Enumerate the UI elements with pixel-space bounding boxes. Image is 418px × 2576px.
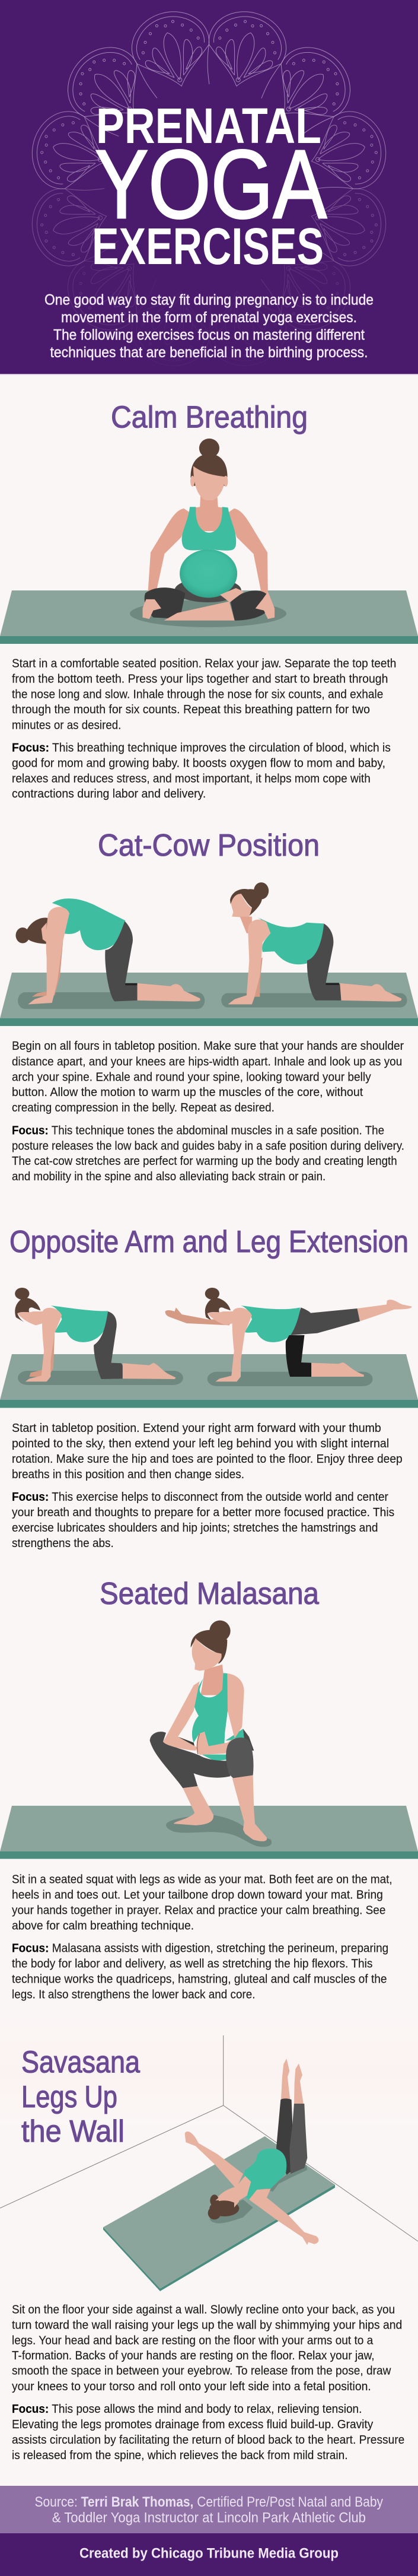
source bar: & Toddler Yoga Instructor at Lincoln Park Athletic Club <box>52 2510 366 2526</box>
yoga mat <box>0 1806 418 1859</box>
body text: cat-cow: distance apart, and your knees are hips-width apart. Inhale and look up as you <box>12 1056 402 1069</box>
yoga mat <box>0 590 418 644</box>
body text: malasana: your hands together in prayer. Relax and practice your calm breathing. See <box>12 1904 385 1917</box>
body text: arm and leg <box>12 1422 403 1550</box>
figures: cat and cow poses <box>16 882 407 1009</box>
body text: savasana <box>12 2303 404 2462</box>
body text: malasana: above for calm breathing technique. <box>12 1919 194 1932</box>
body text: savasana: turn toward the wall raising your legs up the wall by shimmying your hips and <box>12 2319 402 2332</box>
body text: arm and leg: breaths in this position and then change sides. <box>12 1468 244 1481</box>
body text: savasana: T-formation. Backs of your hands are resting on the floor. Relax your jaw, <box>12 2349 375 2362</box>
intro text: movement in the form of prenatal yoga exercises. <box>61 309 357 326</box>
body text: arm and leg: pointed to the sky, then extend your left leg behind you with slight internal <box>12 1437 389 1450</box>
title <box>92 98 327 275</box>
body text: calm breathing: good for mom and growing baby. It boosts oxygen flow to mom and baby, <box>12 757 385 770</box>
body text: malasana <box>12 1873 393 2001</box>
panel: seated malasana <box>0 1577 418 2001</box>
yoga mat <box>0 973 418 1026</box>
body text: savasana: smooth the space in between your eyebrow. To release from the pose, draw <box>12 2365 391 2378</box>
heading: cat-cow: Cat-Cow Position <box>98 828 320 863</box>
body text: malasana: heels in and toes out. Let your tailbone drop down toward your mat. Bring <box>12 1889 383 1902</box>
body text: calm breathing: contractions during labor and delivery. <box>12 787 206 801</box>
body text: arm and leg: your breath and thoughts to prepare for a better more focused practice. This <box>12 1506 394 1519</box>
body text: cat-cow: arch your spine. Exhale and round your spine, looking toward your belly <box>12 1071 371 1084</box>
intro text <box>44 292 374 361</box>
body text: savasana: is released from the spine, which relieves the back from mild strain. <box>12 2449 347 2462</box>
intro text: techniques that are beneficial in the birthing process. <box>50 344 368 361</box>
background tint band <box>0 2012 418 2124</box>
heading: savasana: Legs Up <box>21 2080 117 2114</box>
source bar <box>0 2486 418 2533</box>
body text: malasana: legs. It also strengthens the lower back and core. <box>12 1988 255 2001</box>
body text: calm breathing: the nose long and slow. Inhale through the nose for six counts, and exhale <box>12 688 383 701</box>
body text: calm breathing: minutes or as desired. <box>12 719 121 732</box>
yoga mat <box>0 1354 418 1408</box>
body text: calm breathing <box>12 658 396 801</box>
body text: arm and leg: Focus: This exercise helps to disconnect from the outside world and center <box>12 1491 388 1504</box>
body text: malasana: technique works the quadriceps, hamstring, gluteal and calf muscles of the <box>12 1973 387 1986</box>
body text: savasana: legs. Your head and back are resting on the floor with your arms out to a <box>12 2334 374 2347</box>
mandala ornament <box>24 3 394 374</box>
heading: calm breathing: Calm Breathing <box>111 400 308 434</box>
body text: arm and leg: exercise lubricates shoulders and hip joints; stretches the hamstrings and <box>12 1522 378 1535</box>
panel: savasana legs up the wall <box>0 2035 418 2462</box>
body text: savasana: assists circulation by facilitating the return of blood back to the heart. Pressure <box>12 2434 404 2447</box>
heading: savasana: the Wall <box>21 2114 125 2149</box>
body text: savasana: Focus: This pose allows the mind and body to relax, relieving tension. <box>12 2403 362 2416</box>
title: YOGA <box>95 130 327 239</box>
body text: cat-cow: creating compression in the belly. Repeat as desired. <box>12 1101 275 1114</box>
credit bar: Created by Chicago Tribune Media Group <box>79 2546 339 2562</box>
body text: cat-cow: Focus: This technique tones the abdominal muscles in a safe position. The <box>12 1124 384 1137</box>
intro text: The following exercises focus on mastering different <box>53 327 365 344</box>
body text: malasana: Sit in a seated squat with legs as wide as your mat. Both feet are on the mat, <box>12 1873 393 1886</box>
room corner lines <box>0 2035 418 2241</box>
body text: cat-cow <box>12 1040 404 1183</box>
figures: tabletop and extension poses <box>15 1288 412 1386</box>
panel: calm breathing <box>0 400 418 801</box>
panel: cat-cow position <box>0 828 418 1183</box>
body text: arm and leg: strengthens the abs. <box>12 1537 114 1550</box>
figure: seated woman <box>143 439 275 621</box>
body text: arm and leg: rotation. Make sure the hip and toes are pointed to the floor. Enjoy three deep <box>12 1453 403 1466</box>
title: PRENATAL <box>96 98 321 154</box>
intro text: One good way to stay fit during pregnancy is to include <box>44 292 374 309</box>
body text: savasana: Elevating the legs promotes drainage from excess fluid build-up. Gravity <box>12 2418 373 2431</box>
title: EXERCISES <box>92 218 324 275</box>
panel: opposite arm and leg extension <box>0 1225 418 1550</box>
body text: calm breathing: through the mouth for six counts. Repeat this breathing pattern for two <box>12 703 370 716</box>
body text: malasana: Focus: Malasana assists with digestion, stretching the perineum, preparing <box>12 1942 388 1955</box>
body text: cat-cow: Begin on all fours in tabletop position. Make sure that your hands are shoulder <box>12 1040 404 1053</box>
body text: cat-cow: and mobility in the spine and also alleviating back strain or pain. <box>12 1170 326 1183</box>
body text: calm breathing: Focus: This breathing technique improves the circulation of blood, which is <box>12 742 391 755</box>
panel: header <box>0 0 418 375</box>
heading: seated malasana: Seated Malasana <box>100 1577 319 1611</box>
heading: savasana: Savasana <box>21 2045 140 2080</box>
body text: savasana: your knees to your torso and roll onto your left side into a fetal position. <box>12 2380 371 2393</box>
body text: calm breathing: from the bottom teeth. Press your lips together and start to breath through <box>12 673 388 686</box>
body text: savasana: Sit on the floor your side against a wall. Slowly recline onto your back, as you <box>12 2303 395 2316</box>
credit bar <box>0 2533 418 2576</box>
body text: malasana: the body for labor and delivery, as well as stretching the hip flexors. This <box>12 1957 372 1970</box>
figure: squatting woman <box>150 1621 272 1847</box>
body text: calm breathing: Start in a comfortable seated position. Relax your jaw. Separate the top teeth <box>12 658 396 671</box>
figure: woman with legs up the wall on mat <box>103 2059 335 2291</box>
body text: arm and leg: Start in tabletop position. Extend your right arm forward with your thumb <box>12 1422 381 1435</box>
body text: cat-cow: button. Allow the motion to warm up the muscles of the core, without <box>12 1086 363 1099</box>
source bar: Source: Terri Brak Thomas, Certified Pre/Post Natal and Baby <box>34 2494 383 2510</box>
body text: calm breathing: relaxes and reduces stress, and most important, it helps mom cope with <box>12 773 371 786</box>
body text: cat-cow: The cat-cow stretches are perfect for warming up the body and creating length <box>12 1155 397 1168</box>
heading: savasana <box>21 2045 140 2149</box>
